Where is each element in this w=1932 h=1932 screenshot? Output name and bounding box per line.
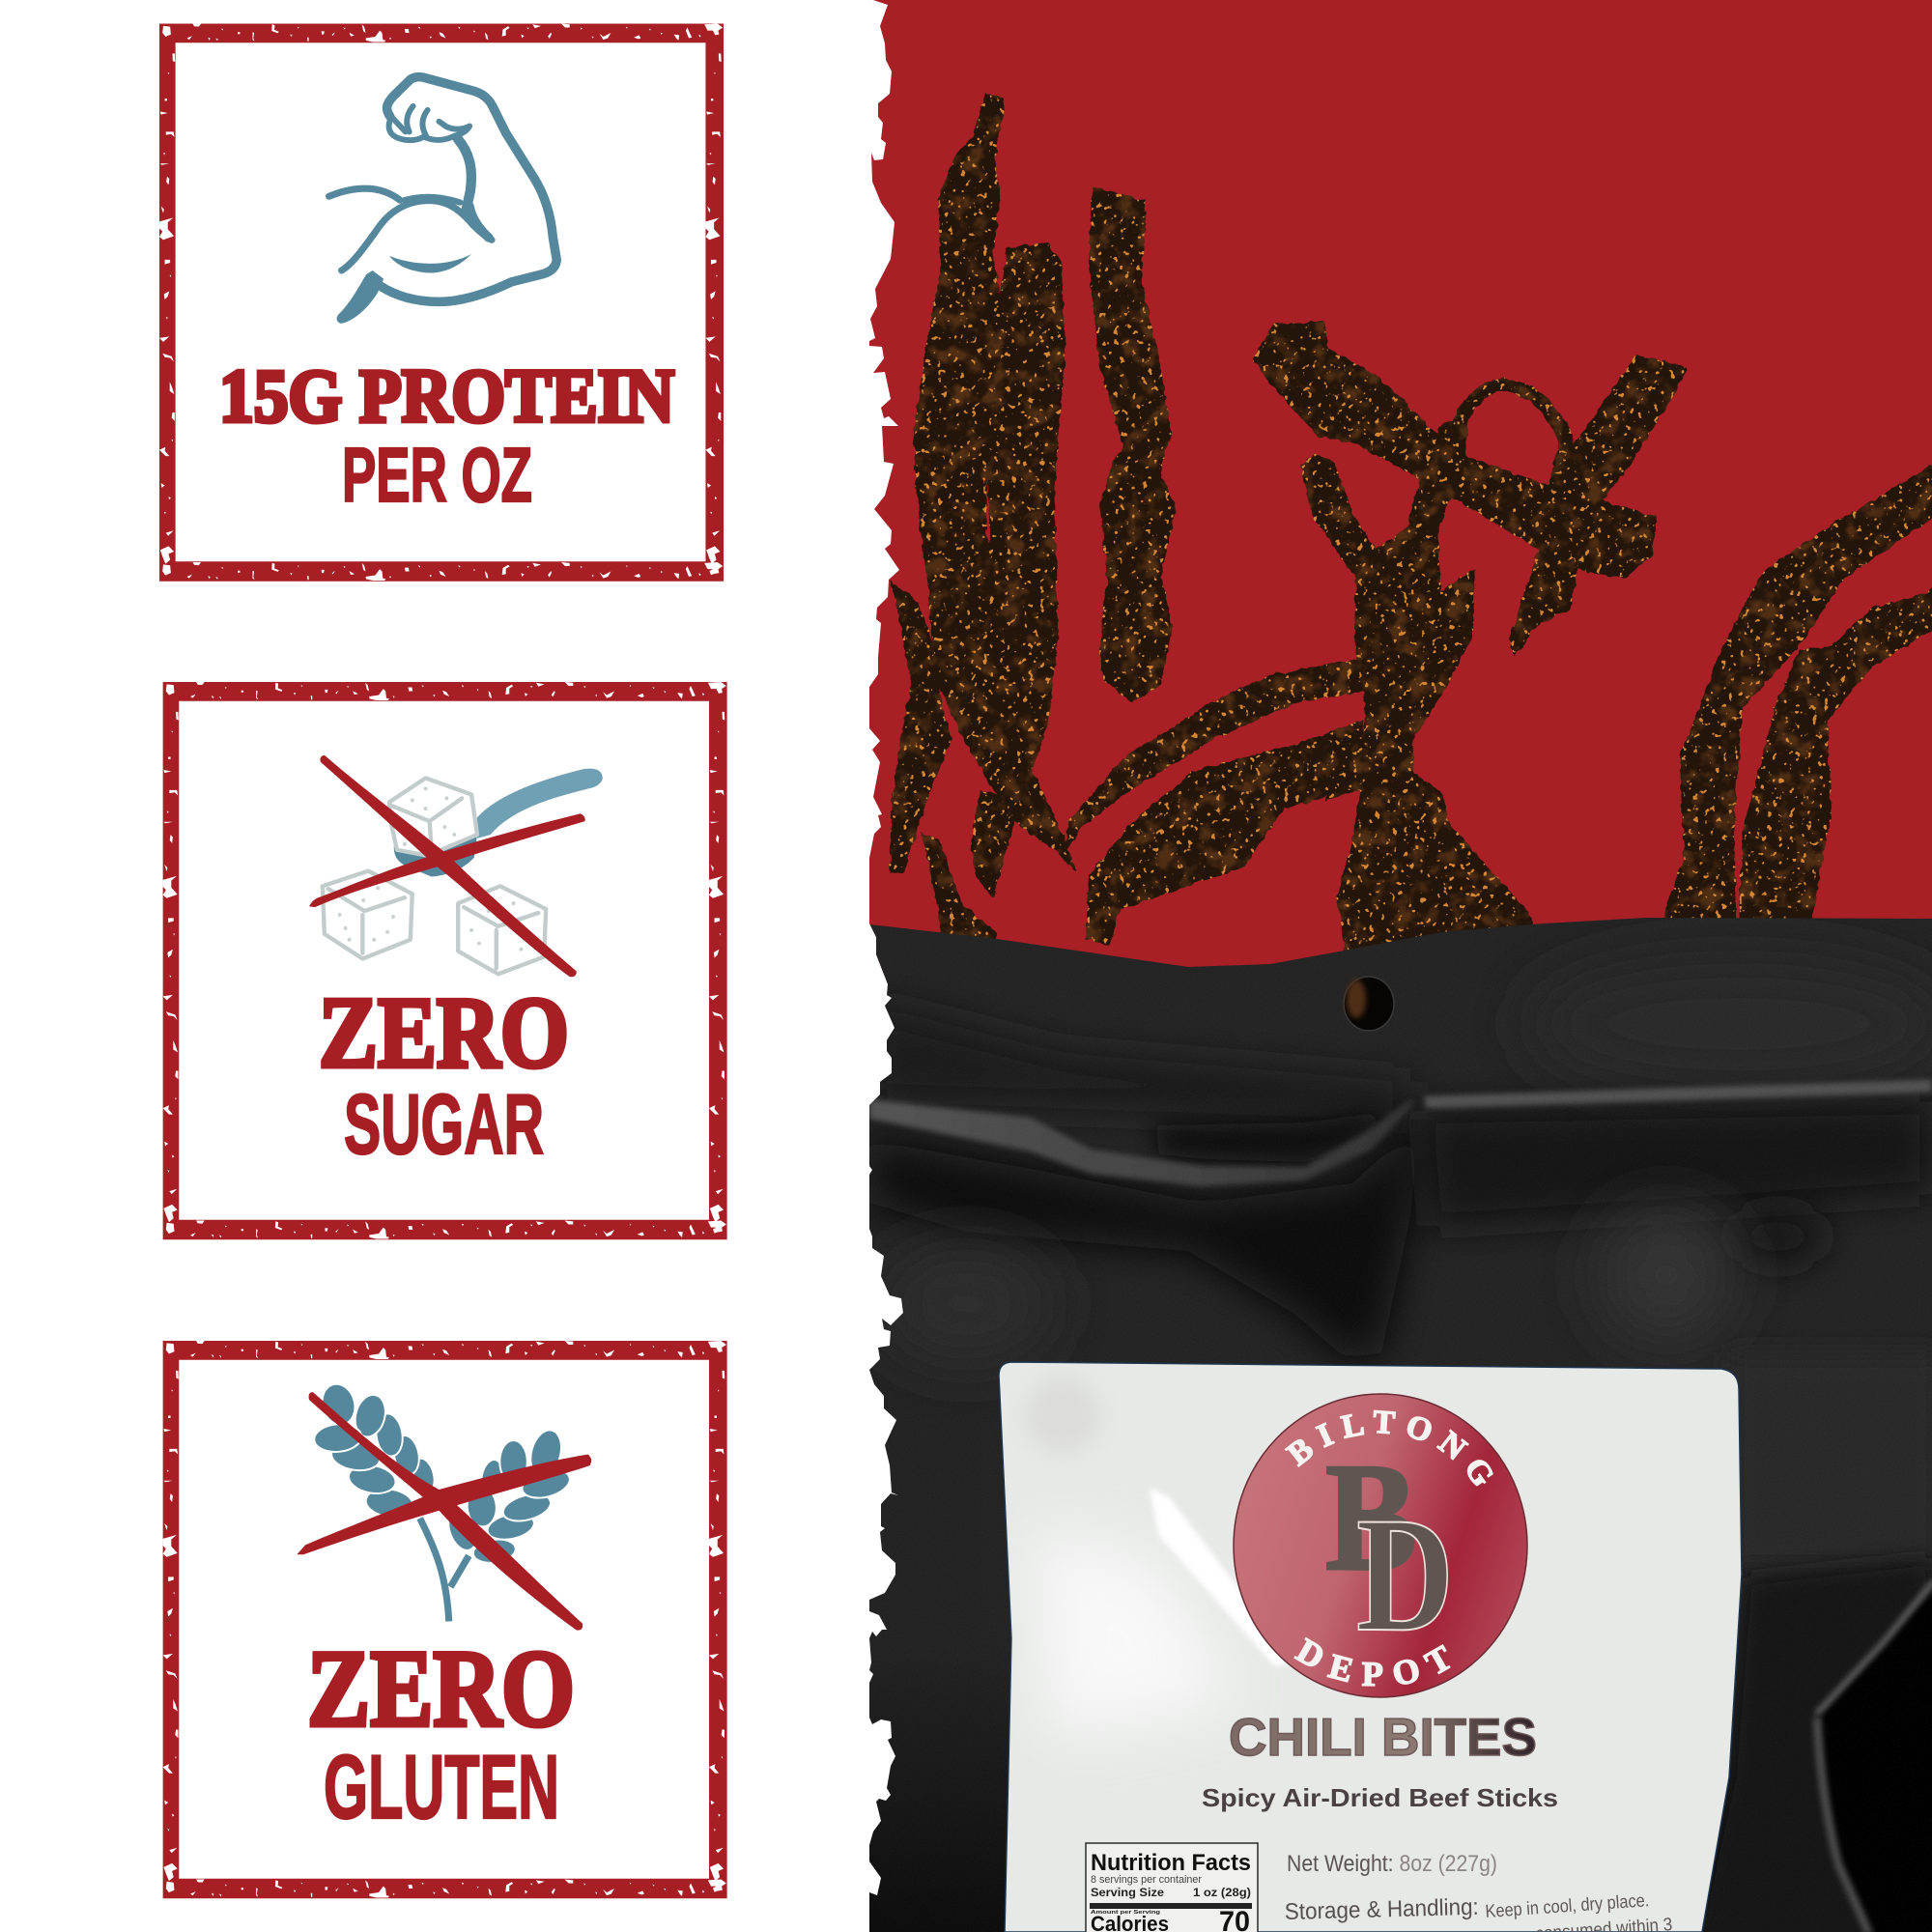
logo badge — [1233, 1393, 1528, 1698]
subheading: SUGAR: SUGAR — [344, 1076, 544, 1172]
nutrition facts panel: Serving Size — [1091, 1886, 1164, 1899]
panel: protein card — [159, 24, 724, 582]
storage heading: Storage & Handling: — [1284, 1894, 1479, 1925]
heading: ZERO: ZERO — [307, 1629, 575, 1749]
label sheen — [1024, 1377, 1294, 1739]
brand arc text lower: DEPOT — [1293, 1636, 1451, 1687]
lower right pouch crease — [1690, 1352, 1932, 1932]
heading: ZERO: ZERO — [319, 976, 569, 1089]
biltong sticks — [891, 93, 1932, 957]
black pouch — [860, 908, 1932, 1932]
nutrition facts panel: Amount per Serving — [1091, 1910, 1160, 1916]
monogram — [1326, 1466, 1448, 1631]
icon: wheat crossed out — [297, 1380, 591, 1631]
product label — [998, 1361, 1743, 1932]
product description: Spicy Air-Dried Beef Sticks — [1202, 1783, 1558, 1812]
panel: zero sugar card — [163, 682, 727, 1239]
card frame: protein — [159, 24, 724, 582]
card frame: gluten — [163, 1341, 727, 1898]
heading: 15G PROTEIN: 15G PROTEIN — [219, 354, 674, 438]
icon: sugar cubes and spoon crossed out — [309, 755, 603, 977]
subheading: PER OZ: PER OZ — [342, 432, 532, 518]
nutrition facts panel: 1 oz (28g) — [1193, 1886, 1251, 1899]
panel: zero gluten card — [163, 1341, 727, 1898]
net weight: Net Weight: 8oz (227g) — [1287, 1851, 1497, 1877]
subheading: GLUTEN: GLUTEN — [324, 1736, 559, 1837]
nutrition facts panel — [1086, 1843, 1258, 1932]
storage text: Keep in cool, dry place. — [1485, 1890, 1650, 1922]
monogram: D — [1356, 1484, 1454, 1665]
brand arc text: BILTONG — [1285, 1410, 1493, 1487]
card frame: sugar — [163, 682, 727, 1239]
red backdrop — [860, 0, 1932, 976]
product name: CHILI BITES — [1229, 1707, 1537, 1767]
icon: flexed arm — [329, 77, 556, 324]
nutrition facts panel: Nutrition Facts — [1091, 1850, 1251, 1876]
nutrition facts panel: 8 servings per container — [1091, 1874, 1202, 1886]
monogram: B — [1325, 1431, 1417, 1603]
panel: product photo with torn edge — [869, 0, 1932, 1932]
hang hole — [1344, 977, 1394, 1031]
pouch folds and shading — [860, 908, 1932, 1932]
